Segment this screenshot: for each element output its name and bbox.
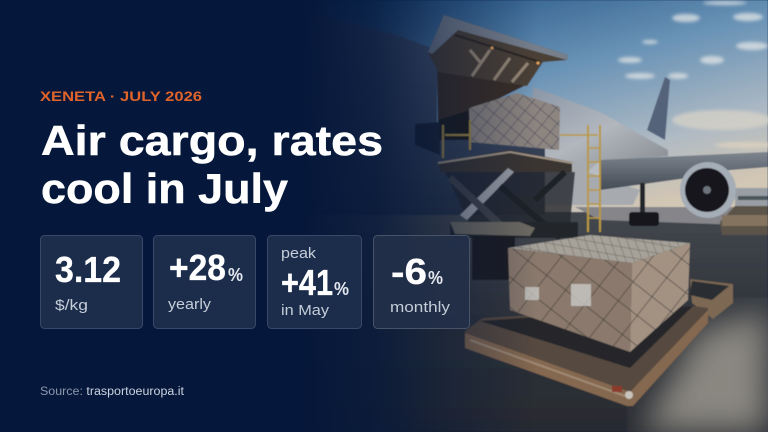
- engine: [680, 162, 736, 218]
- stat card: price per kg: [40, 236, 142, 328]
- stat card: yearly change: +28: [169, 247, 226, 288]
- wing: [600, 152, 768, 190]
- stat card: yearly change: [154, 236, 256, 328]
- clouds: [618, 1, 768, 148]
- forward fuselage: [280, 5, 545, 215]
- stat card: May peak: [268, 236, 362, 328]
- stat card: monthly change: [374, 236, 470, 328]
- lower belly: [540, 160, 640, 205]
- cargo hold interior: [437, 70, 528, 124]
- tail fin: [647, 77, 670, 140]
- horizon buildings: [735, 188, 768, 206]
- stat card: May peak: %: [334, 279, 349, 299]
- stat card: price per kg: 3.12: [55, 249, 121, 290]
- sky: [270, 0, 768, 212]
- stat card: monthly change: %: [428, 268, 443, 288]
- loaded cargo on lift: [469, 93, 560, 150]
- stat card: monthly change: monthly: [390, 299, 451, 316]
- rear fuselage: [530, 87, 668, 161]
- far pallet: [720, 206, 768, 235]
- background photo: cargo aircraft loading: [270, 0, 768, 432]
- eyebrow: XENETA · JULY 2026: [40, 88, 202, 104]
- foreground pallet: [465, 306, 708, 406]
- foreground side pallet: [690, 279, 733, 319]
- stat card: May peak: in May: [281, 302, 330, 319]
- stat card: yearly change: %: [228, 265, 243, 285]
- stat card: monthly change: -6: [391, 251, 427, 292]
- wet concrete patch: [640, 310, 768, 432]
- ground: [270, 212, 768, 432]
- source line: Source: trasportoeuropa.it: [40, 386, 185, 398]
- concrete apron: [575, 207, 768, 226]
- stat card: May peak: peak: [281, 245, 317, 262]
- stat card: May peak: +41: [281, 262, 333, 303]
- title: Air cargo, rates: [41, 117, 383, 164]
- stat card: yearly change: yearly: [168, 296, 212, 313]
- title: [41, 117, 383, 212]
- landing gear: [640, 183, 645, 213]
- scissor lift: [415, 120, 578, 280]
- cargo door: [428, 15, 568, 86]
- stat card: price per kg: $/kg: [55, 297, 88, 314]
- foreground cargo: [508, 235, 690, 352]
- yellow stairs: [560, 125, 600, 232]
- title: cool in July: [41, 165, 289, 212]
